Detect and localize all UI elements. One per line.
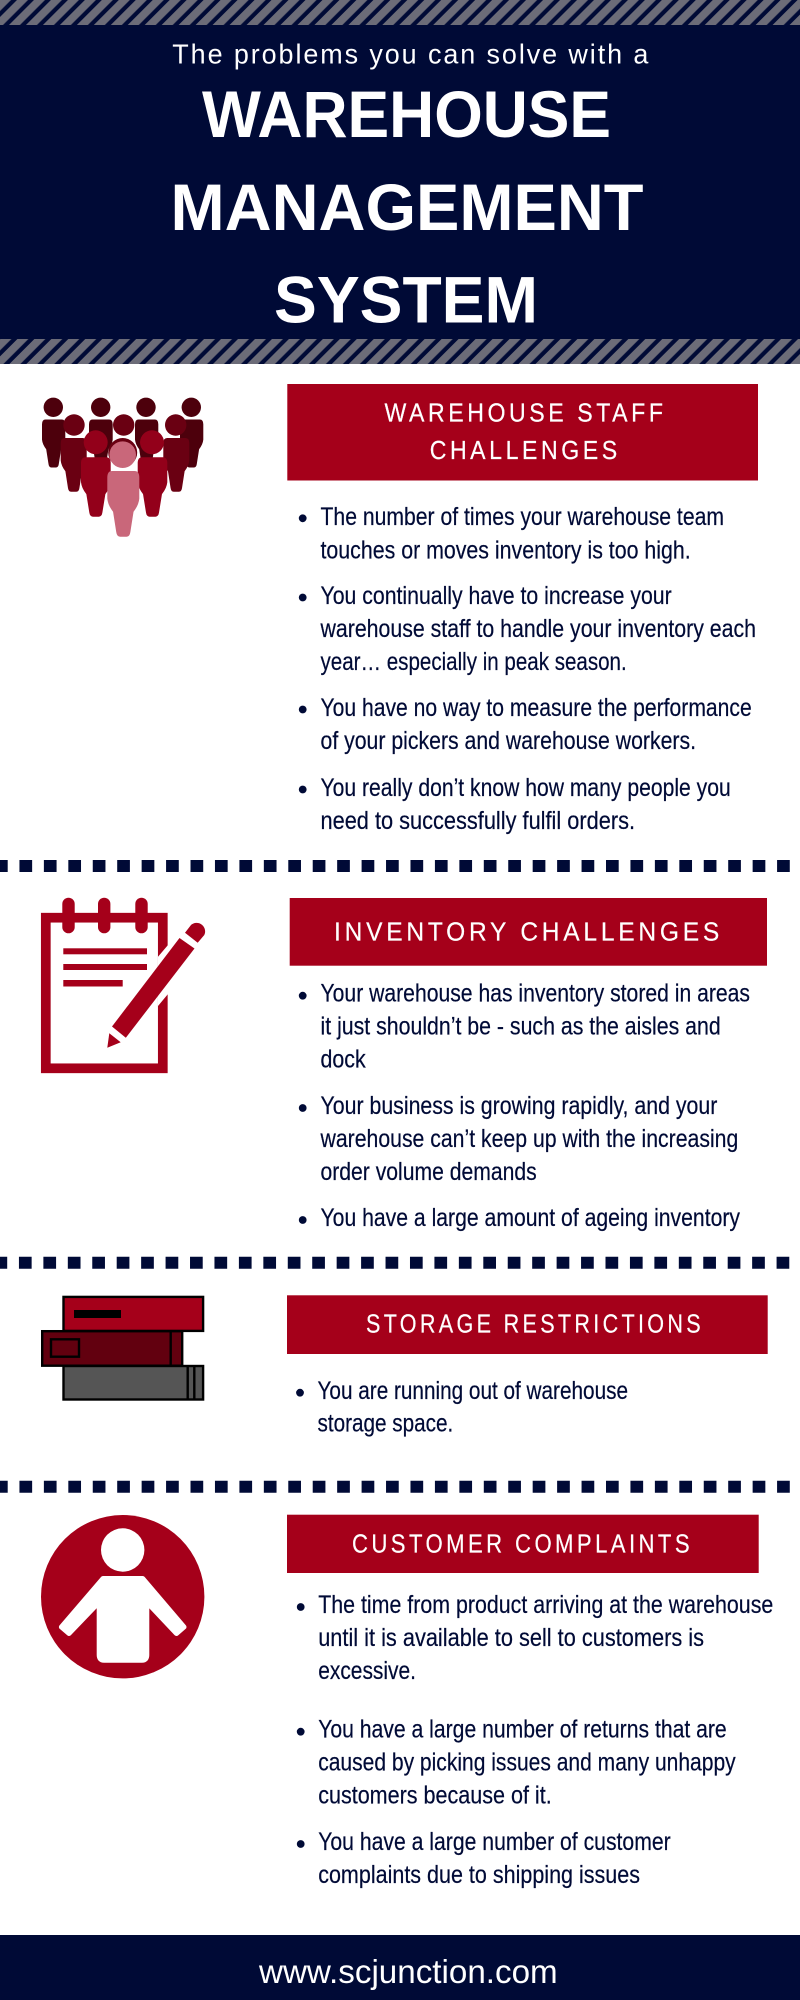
list: storage problems [296, 1377, 628, 1437]
list: inventory problems: it just shouldn’t be - such as the aisles and [320, 1013, 721, 1041]
icon: stack of books [42, 1297, 203, 1400]
heading: inventory challenges [290, 898, 767, 966]
footer bar [0, 1935, 800, 2000]
list: inventory problems: order volume demands [320, 1158, 537, 1186]
heading: warehouse staff challenges: WAREHOUSE STAFF [384, 398, 666, 428]
panel: inventory challenges [46, 898, 767, 1232]
title: WAREHOUSE [202, 77, 611, 151]
panel: customer complaints [41, 1515, 773, 1889]
list: staff problems: The number of times your warehouse team [320, 503, 724, 531]
list: inventory problems [299, 980, 750, 1232]
list: storage problems: You are running out of warehouse [318, 1377, 628, 1405]
list: customer problems [297, 1591, 773, 1889]
panel: warehouse staff challenges [42, 384, 758, 835]
bottom stripe band [0, 339, 800, 364]
heading: warehouse staff challenges: CHALLENGES [430, 435, 621, 465]
icon: person in circle [41, 1515, 204, 1678]
list: inventory problems: dock [320, 1046, 366, 1074]
list: customer problems: caused by picking issues and many unhappy [318, 1749, 736, 1777]
list: inventory problems: warehouse can’t keep up with the increasing [320, 1125, 738, 1153]
heading: storage restrictions [287, 1295, 768, 1354]
list: storage problems: storage space. [318, 1409, 453, 1437]
list: staff problems: You really don’t know how many people you [320, 774, 731, 802]
list: staff problems [299, 503, 756, 835]
list: staff problems: need to successfully fulfil orders. [320, 807, 635, 835]
title [170, 77, 644, 336]
list: staff problems: touches or moves inventory is too high. [320, 536, 691, 564]
list: customer problems: excessive. [318, 1657, 416, 1685]
list: customer problems: You have a large number of returns that are [318, 1716, 727, 1744]
icon: notepad and pencil [46, 898, 205, 1068]
subtitle: The problems you can solve with a [172, 38, 650, 69]
list: customer problems: complaints due to shipping issues [318, 1861, 640, 1889]
header banner [0, 0, 800, 364]
list: inventory problems: Your business is growing rapidly, and your [320, 1092, 717, 1120]
panel: storage restrictions [42, 1295, 768, 1437]
title: MANAGEMENT [170, 170, 644, 244]
list: customer problems: You have a large number of customer [318, 1828, 671, 1856]
list: customer problems: customers because of it. [318, 1782, 552, 1810]
heading: customer complaints [287, 1515, 759, 1573]
icon: group of people [42, 398, 203, 537]
heading: storage restrictions: STORAGE RESTRICTIONS [366, 1309, 704, 1339]
heading: warehouse staff challenges [287, 384, 758, 480]
website address: www.scjunction.com [258, 1953, 558, 1990]
list: staff problems: of your pickers and warehouse workers. [320, 727, 696, 755]
top stripe band [0, 0, 800, 25]
heading: customer complaints: CUSTOMER COMPLAINTS [352, 1528, 693, 1558]
list: staff problems: You continually have to increase your [320, 582, 672, 610]
list: customer problems: until it is available to sell to customers is [318, 1624, 704, 1652]
list: staff problems: year… especially in peak season. [320, 648, 627, 676]
heading: inventory challenges: INVENTORY CHALLENGES [334, 917, 723, 947]
title: SYSTEM [274, 262, 538, 336]
